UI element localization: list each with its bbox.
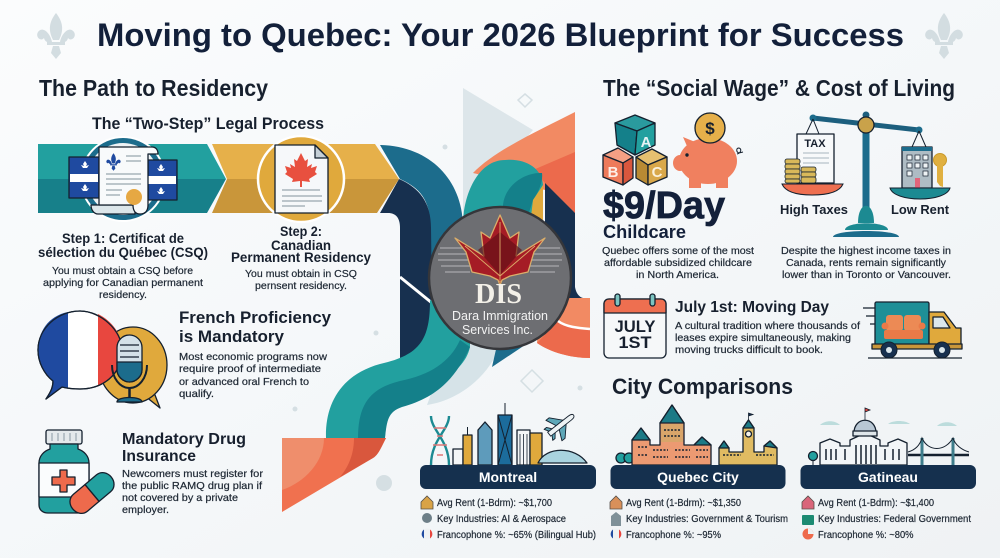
icon: alphabet blocks: A [641,134,652,151]
central ribbon graphic [282,88,590,512]
text: French proficiency: is Mandatory [179,327,285,346]
icon: balance scale: TAX [804,138,826,150]
logo badge: Dara Immigration Services: Services Inc. [462,323,533,337]
label: Low Rent: Low Rent [891,202,950,217]
text: French proficiency [179,308,332,400]
text: moving day: A cultural tradition where thousands of [675,320,860,332]
text: childcare description: affordable subsidized childcare [604,257,752,269]
icons and facts: Montreal: Key Industries: AI & Aerospace [437,514,566,525]
card: Quebec City [610,405,788,541]
icons and facts: Gatineau: Francophone %: ~80% [818,530,914,541]
illustration: Montreal skyline [431,403,587,465]
panel: city comparisons [420,374,976,541]
icon: piggy bank with coin: $ [705,119,715,138]
icon: July 1st calendar: 1ST [618,333,652,352]
icons and facts: Gatineau [802,496,971,541]
label: Childcare: Childcare [603,222,686,242]
illustration: Quebec City skyline [616,405,777,465]
panel: social wage and cost of living [602,75,962,358]
logo badge: Dara Immigration Services: DIS [475,278,522,310]
text: step 1: sélection du Québec (CSQ) [38,245,208,260]
icon: medicine bottle and capsule [39,430,118,517]
label bar: Gatineau [800,465,976,489]
text: step 1: Step 1: Certificat de [62,231,184,246]
logo badge: Dara Immigration Services: Dara Immigration [452,309,548,323]
icon: French speech bubbles with microphone [38,311,167,408]
icons and facts: Quebec City: Avg Rent (1-Bdrm): ~$1,350 [626,498,741,509]
text: step 2: Step 2: [280,224,322,239]
text: step 1: applying for Canadian permanent [43,277,203,289]
text: drug insurance: Insurance [122,448,196,465]
stat: $9/Day: $9/Day [603,185,725,227]
text: drug insurance [122,431,264,516]
icons and facts: Montreal: Francophone %: ~65% (Bilingual Hub) [437,530,596,541]
heading: social wage: The “Social Wage” & Cost of Living [603,75,955,101]
icon: moving truck with couch [863,302,962,358]
label bar: Montreal [420,465,596,489]
subheading: two-step process: The “Two-Step” Legal Process [92,114,324,133]
text: drug insurance: Mandatory Drug [122,431,246,448]
label: High Taxes: High Taxes [780,202,848,217]
text: childcare description: in North America. [636,269,719,281]
text: step 2: Permanent Residency [231,250,371,265]
text: childcare description: Quebec offers some of the most [602,245,754,257]
heading: city comparisons: City Comparisons [612,374,793,399]
icon: Canadian residency document [257,135,345,223]
label bar: Montreal: Montreal [479,469,537,485]
icons and facts: Quebec City [610,496,788,541]
label bar: Quebec City [610,465,786,489]
icons and facts: Quebec City: Francophone %: ~95% [626,530,721,541]
text: taxes and rents description: lower than in Toronto or Vancouver. [782,269,951,281]
card: Gatineau [800,408,976,541]
title: Moving to Quebec: Your 2026 Blueprint for Success [97,17,904,53]
icon: July 1st calendar: JULY [614,317,656,336]
text: taxes and rents description: Canada, rents remain significantly [786,257,947,269]
text: moving day: July 1st: Moving Day [675,299,829,316]
text: French proficiency: French Proficiency [179,308,332,327]
arrow: step 1 chevron [38,144,226,213]
text: step 1: You must obtain a CSQ before [52,265,193,277]
text: French proficiency: qualify. [179,388,214,400]
icon: alphabet blocks [603,115,667,185]
icons and facts: Montreal: Avg Rent (1-Bdrm): ~$1,700 [437,498,552,509]
illustration: Gatineau skyline [808,408,969,465]
arrow: step 2 chevron [212,144,399,213]
text: French proficiency: Most economic programs now [179,351,327,363]
text: taxes and rents description: Despite the highest income taxes in [781,245,951,257]
text: step 2: Canadian [271,238,331,253]
text: step 2: pernsent residency. [255,280,347,292]
label bar: Gatineau: Gatineau [858,469,918,485]
icons and facts: Quebec City: Key Industries: Government & Tourism [626,514,788,525]
text: drug insurance: Newcomers must register for [122,468,264,480]
text: drug insurance: the public RAMQ drug plan if [122,480,262,492]
card: Montreal [420,403,596,541]
text: drug insurance: employer. [122,504,169,516]
text: moving day: moving trucks difficult to book. [675,344,823,356]
icon: fleur-de-lis right [925,13,963,59]
text: step 2: You must obtain in CSQ [245,268,357,280]
text: taxes and rents description [781,245,951,281]
text: drug insurance: not covered by a private [122,492,238,504]
label bar: Quebec City: Quebec City [657,469,739,485]
icon: Quebec flags and certificate [69,136,177,222]
icon: balance scale [782,112,950,237]
icon: fleur-de-lis left [37,13,75,59]
text: step 1: residency. [99,289,147,301]
heading: path to residency: The Path to Residency [39,75,268,101]
text: moving day [675,299,860,356]
icon: July 1st calendar [604,294,666,358]
text: French proficiency: or advanced oral French to [179,376,309,388]
logo badge: Dara Immigration Services [429,207,571,349]
icons and facts: Gatineau: Key Industries: Federal Government [818,514,971,525]
icons and facts: Gatineau: Avg Rent (1-Bdrm): ~$1,400 [818,498,934,509]
text: step 1 [38,231,208,301]
text: childcare description [602,245,754,281]
panel: the path to residency [38,75,399,517]
icon: alphabet blocks: C [652,164,663,181]
icons and facts: Montreal [421,496,596,541]
text: French proficiency: require proof of intermediate [179,363,321,375]
decorative dots and diamonds [292,94,582,491]
icon: piggy bank with coin [673,113,743,188]
icon: alphabet blocks: B [608,164,619,181]
text: step 2 [231,224,371,292]
text: moving day: leases expire simultaneously, making [675,332,851,344]
logo maple leaf [455,215,545,285]
